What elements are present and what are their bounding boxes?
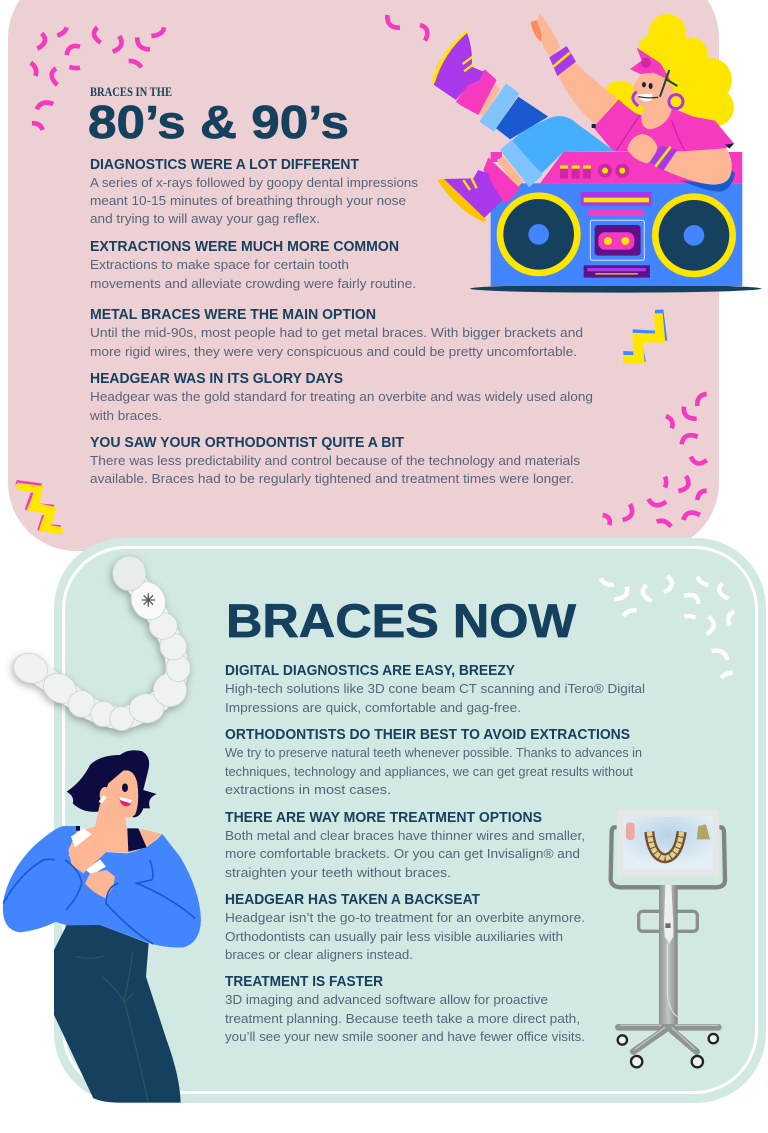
right arm <box>592 124 735 192</box>
panel: braces now <box>54 538 766 1103</box>
text block: treatment is faster <box>225 974 585 1044</box>
text block: avoid extractions <box>225 727 642 797</box>
text block: orthodontist visits <box>90 435 580 486</box>
text block: avoid extractions: extractions in most cases. <box>225 782 391 797</box>
confetti: pink bottom right <box>603 394 707 527</box>
small heading: braces in the: BRACES IN THE <box>90 84 172 99</box>
face <box>630 48 683 129</box>
text block: metal braces: more rigid wires, they were very conspicuous and could be pretty uncomfortable. <box>90 344 577 359</box>
text block: treatment is faster: treatment planning. Because teeth take a more direct path, <box>225 1011 580 1026</box>
text block: avoid extractions: We try to preserve natural teeth whenever possible. Thanks to advances in <box>225 745 642 760</box>
text block: extractions: Extractions to make space for certain tooth <box>90 257 349 272</box>
image: clear aligner <box>9 556 190 731</box>
text block: extractions <box>90 239 416 291</box>
confetti: pink top left <box>31 15 427 130</box>
text block: treatment options: more comfortable brackets. Or you can get Invisalign® and <box>225 846 580 861</box>
icon: yellow zigzag left <box>15 480 63 535</box>
text block: orthodontist visits: There was less predictability and control because of the technology and materials <box>90 453 580 468</box>
text block: avoid extractions: ORTHODONTISTS DO THEIR BEST TO AVOID EXTRACTIONS <box>225 727 630 743</box>
text block: diagnostics: and trying to will away your gag reflex. <box>90 211 320 226</box>
text block: treatment is faster: 3D imaging and advanced software allow for proactive <box>225 992 548 1007</box>
panel: braces in the 80's and 90's <box>8 0 719 551</box>
text block: headgear backseat: HEADGEAR HAS TAKEN A BACKSEAT <box>225 892 480 908</box>
text block: diagnostics: DIAGNOSTICS WERE A LOT DIFFERENT <box>90 157 359 173</box>
text block: treatment options: Both metal and clear braces have thinner wires and smaller, <box>225 828 585 843</box>
jeans <box>54 925 181 1103</box>
text block: digital diagnostics: DIGITAL DIAGNOSTICS ARE EASY, BREEZY <box>225 663 515 679</box>
text block: headgear backseat: Orthodontists can usually pair less visible auxiliaries with <box>225 929 563 944</box>
text block: treatment options <box>225 810 585 880</box>
text block: headgear: with braces. <box>89 408 162 423</box>
lower leg <box>437 116 615 222</box>
shirt <box>593 99 734 152</box>
text block: digital diagnostics: High-tech solutions like 3D cone beam CT scanning and iTero® Digital <box>225 681 645 696</box>
text block: treatment is faster: you’ll see your new smile sooner and have fewer office visits. <box>225 1029 585 1044</box>
text block: headgear backseat <box>225 892 585 962</box>
text block: metal braces: Until the mid-90s, most people had to get metal braces. With bigger brackets and <box>90 325 583 340</box>
text block: metal braces <box>90 307 583 359</box>
text block: treatment is faster: TREATMENT IS FASTER <box>225 974 384 990</box>
raised arm <box>531 13 617 126</box>
sleeve folds <box>3 859 195 944</box>
text block: digital diagnostics <box>225 663 645 715</box>
text block: orthodontist visits: available. Braces had to be regularly tightened and treatment times were longer. <box>90 471 574 486</box>
neck and hands <box>68 803 162 898</box>
text block: extractions: movements and alleviate crowding were fairly routine. <box>90 276 416 291</box>
text block: diagnostics: A series of x-rays followed by goopy dental impressions <box>90 175 418 190</box>
text block: extractions: EXTRACTIONS WERE MUCH MORE COMMON <box>90 239 399 255</box>
text block: diagnostics: meant 10-15 minutes of breathing through your nose <box>90 193 406 208</box>
text block: digital diagnostics: Impressions are quick, comfortable and gag-free. <box>225 700 521 715</box>
sweater <box>3 826 201 947</box>
icon: yellow zigzag right <box>623 309 667 364</box>
boombox <box>470 152 761 293</box>
text block: treatment options: straighten your teeth without braces. <box>225 865 451 880</box>
text block: headgear backseat: braces or clear aligners instead. <box>225 947 413 962</box>
text block: headgear: Headgear was the gold standard for treating an overbite and was widely used along <box>90 389 593 404</box>
text block: orthodontist visits: YOU SAW YOUR ORTHODONTIST QUITE A BIT <box>90 435 404 451</box>
hair <box>67 750 157 817</box>
title: braces now: BRACES NOW <box>226 594 577 647</box>
text block: metal braces: METAL BRACES WERE THE MAIN OPTION <box>90 307 376 323</box>
face <box>99 770 138 817</box>
confetti: white top right <box>601 576 734 678</box>
illustration: woman on boombox <box>432 13 761 293</box>
text block: headgear <box>89 371 593 423</box>
text block: diagnostics <box>90 157 418 226</box>
title: 80's and 90's: 80’s & 90’s <box>88 96 349 148</box>
raised leg <box>432 30 548 139</box>
illustration: woman with aligner case <box>3 750 201 1103</box>
text block: headgear backseat: Headgear isn’t the go-to treatment for an overbite anymore. <box>225 910 585 925</box>
image: iTero scanner <box>611 809 725 1067</box>
text block: treatment options: THERE ARE WAY MORE TREATMENT OPTIONS <box>225 810 542 826</box>
text block: headgear: HEADGEAR WAS IN ITS GLORY DAYS <box>90 371 343 387</box>
text block: avoid extractions: techniques, technology and appliances, we can get great results without <box>225 764 633 779</box>
hair <box>603 14 734 126</box>
